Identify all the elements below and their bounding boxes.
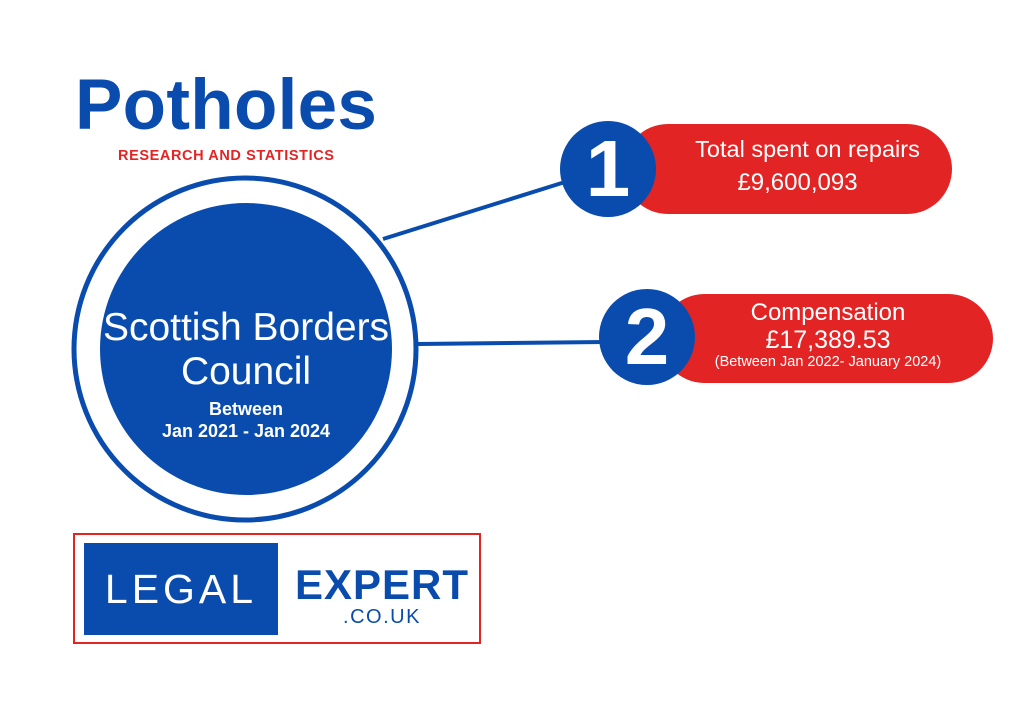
pill 2 <box>660 294 993 383</box>
subtitle: RESEARCH AND STATISTICS <box>118 148 335 164</box>
circle text: Between <box>209 399 283 419</box>
icon: number 2 badge <box>599 289 695 385</box>
icon: number 1 badge <box>560 121 656 217</box>
inner circle <box>100 203 392 495</box>
pill 1 <box>623 124 952 214</box>
icon: number 2 badge: 2 <box>625 292 669 381</box>
logo text: .CO.UK <box>343 606 421 628</box>
icon: number 1 badge: 1 <box>586 124 630 213</box>
logo text: EXPERT <box>295 561 469 608</box>
panel: item 1 <box>560 121 952 217</box>
title: Potholes <box>75 66 377 145</box>
circle text: Council <box>181 350 311 393</box>
outer ring <box>74 178 416 520</box>
pill 2: (Between Jan 2022- January 2024) <box>715 354 941 370</box>
pill 2: £17,389.53 <box>765 326 891 354</box>
circle text <box>103 306 389 441</box>
pill 1: Total spent on repairs <box>695 136 920 162</box>
circle text: Scottish Borders <box>103 306 389 349</box>
arrow: connector to item 1 <box>383 182 565 239</box>
pill 2: Compensation <box>751 299 905 326</box>
logo blue block: LEGAL <box>105 566 257 612</box>
panel: item 2 <box>599 289 993 385</box>
pill 1: £9,600,093 <box>737 169 858 196</box>
arrow: connector to item 2 <box>418 342 605 344</box>
logo blue block <box>84 543 278 635</box>
logo: Legal Expert <box>73 533 481 644</box>
circle text: Jan 2021 - Jan 2024 <box>162 421 330 441</box>
